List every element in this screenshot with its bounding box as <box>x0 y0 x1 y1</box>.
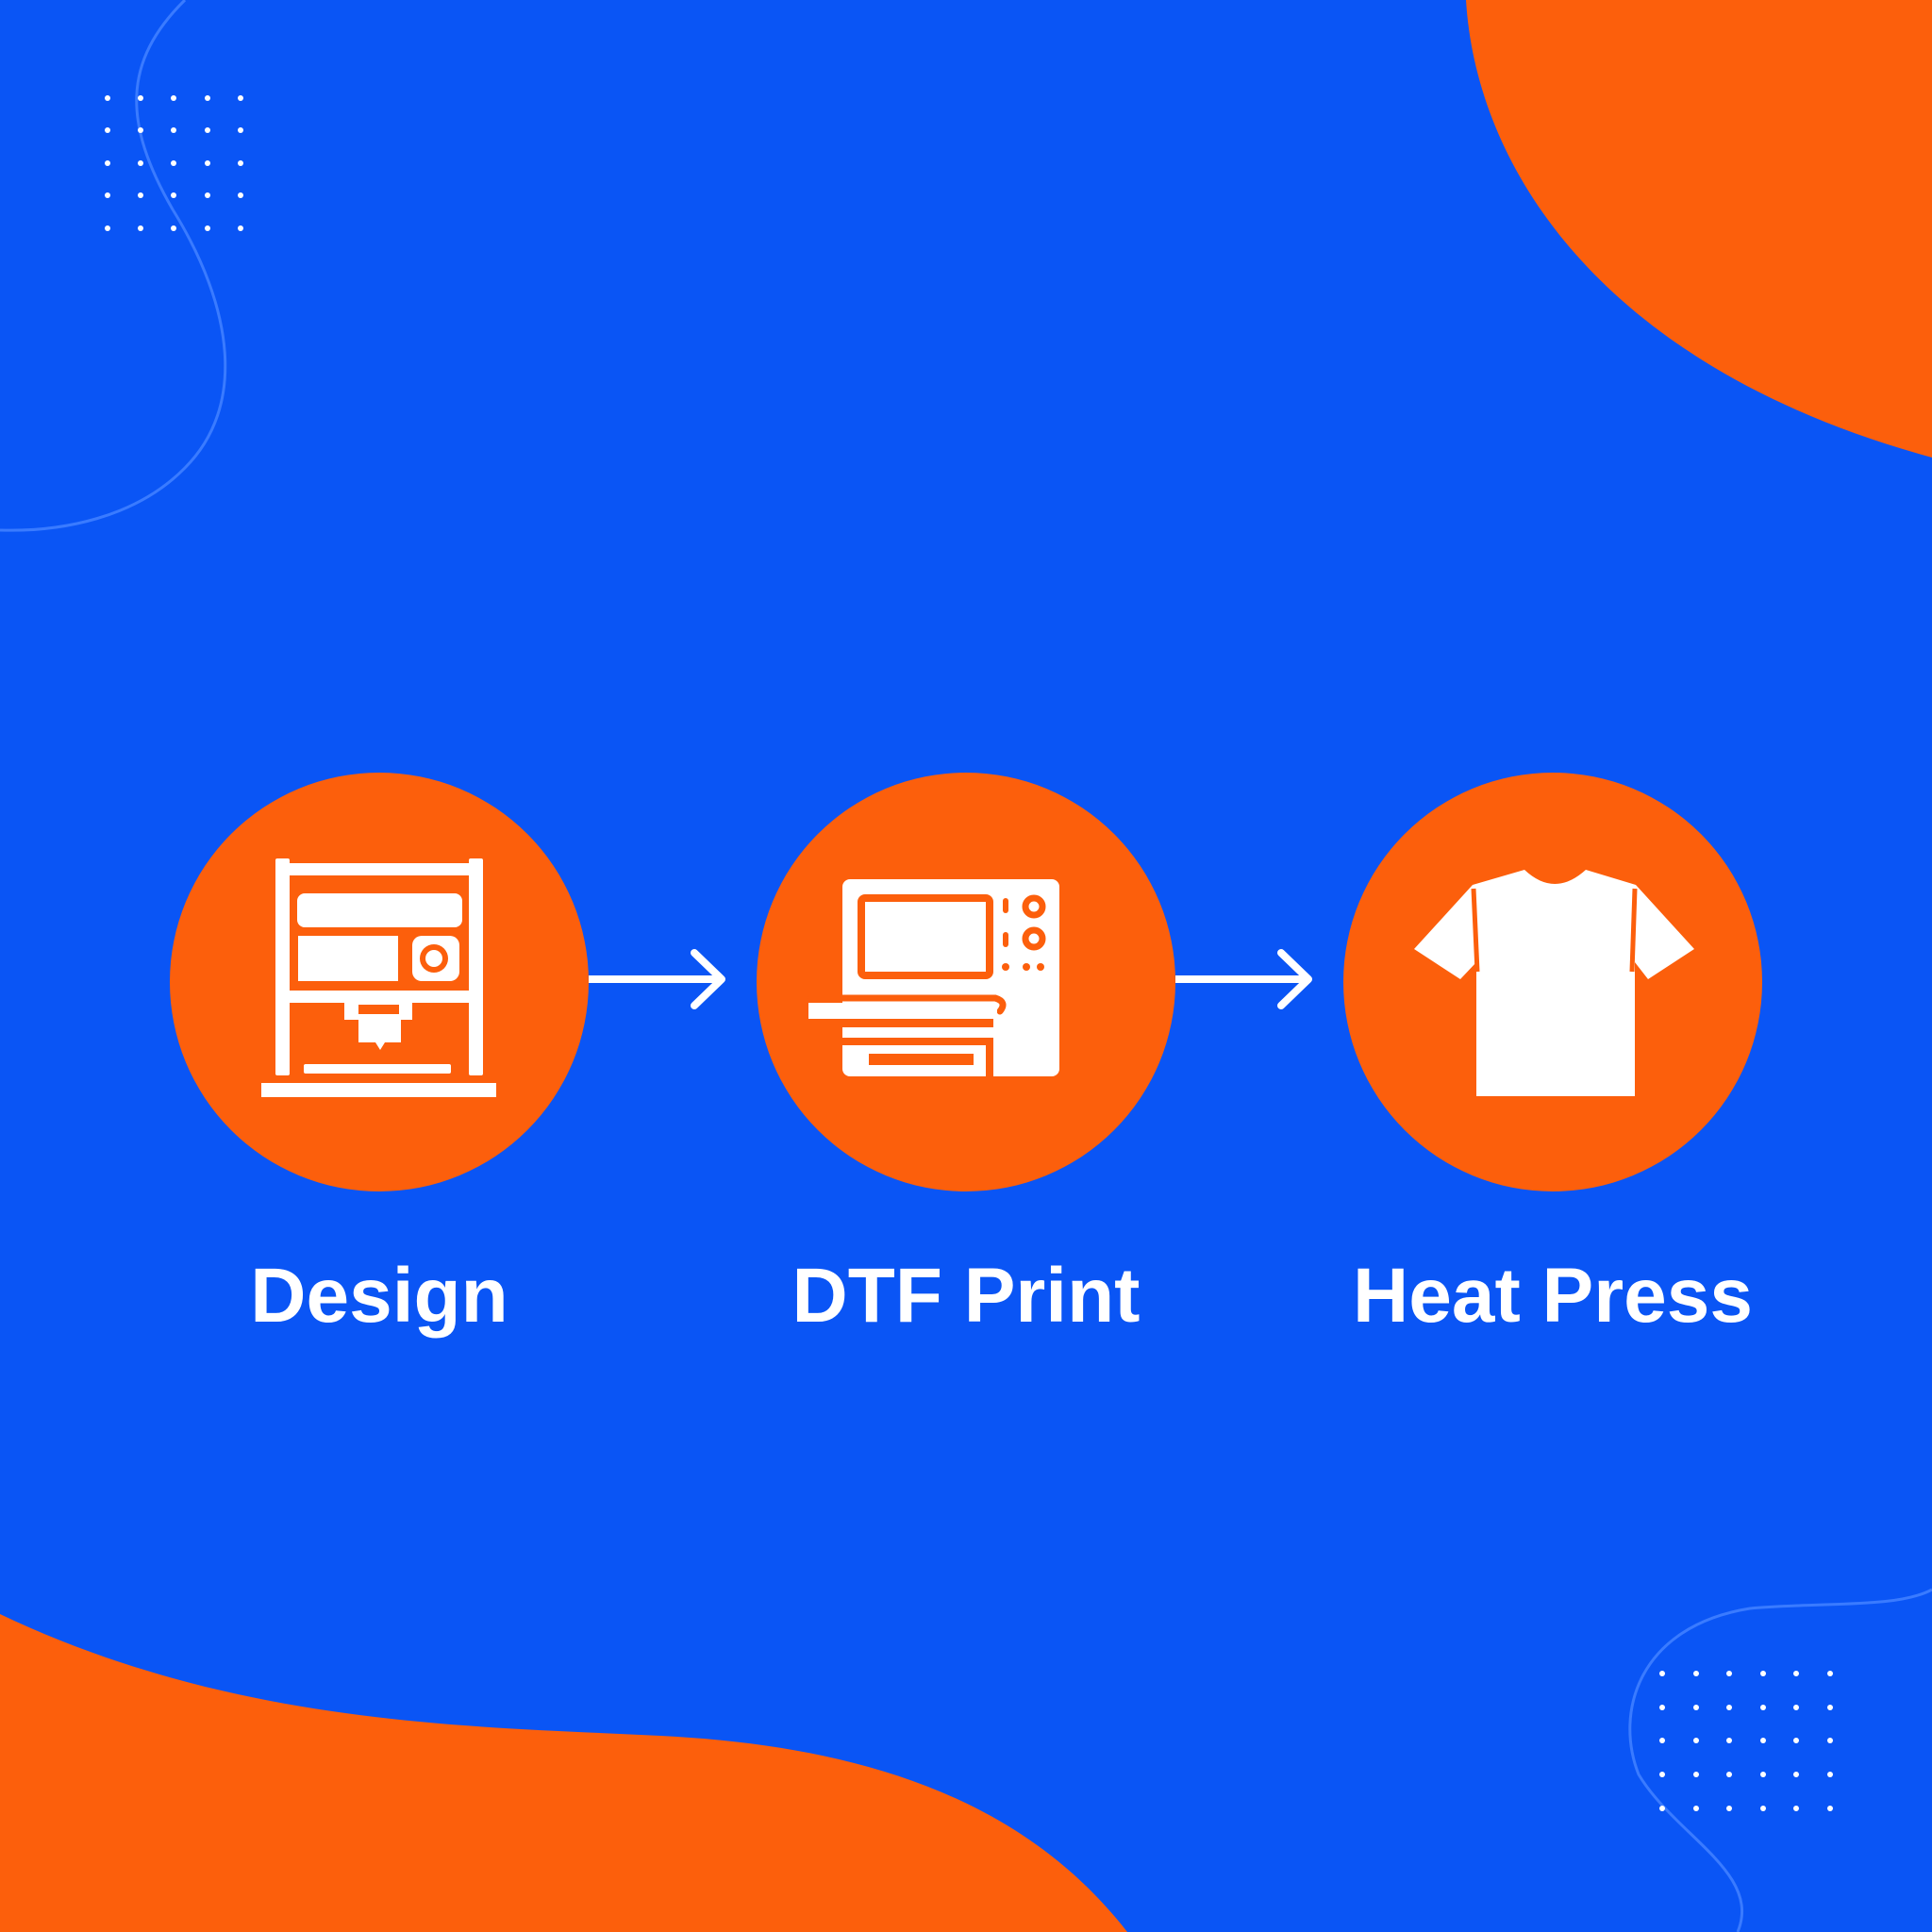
decorative line: top left <box>0 0 225 530</box>
blob: top right <box>1466 0 1932 458</box>
decorative line: bottom right <box>1630 1590 1932 1932</box>
icon: t-shirt <box>1414 870 1694 1096</box>
blob: bottom left <box>0 1614 1127 1932</box>
arrow 2 <box>1175 953 1308 1006</box>
step 2: DTF print <box>757 773 1175 1191</box>
label: DTF Print: DTF Print <box>792 1253 1140 1339</box>
label: Design: Design <box>250 1253 508 1339</box>
dot grid: bottom right <box>1659 1671 1833 1811</box>
dot grid: top left <box>105 95 243 231</box>
step 3: heat press <box>1343 773 1762 1191</box>
arrow 1 <box>589 953 722 1006</box>
label: Heat Press: Heat Press <box>1353 1253 1753 1339</box>
step 1: design <box>170 773 589 1191</box>
icon: DTF printer <box>808 879 1059 1076</box>
icon: printer frame <box>261 858 496 1097</box>
